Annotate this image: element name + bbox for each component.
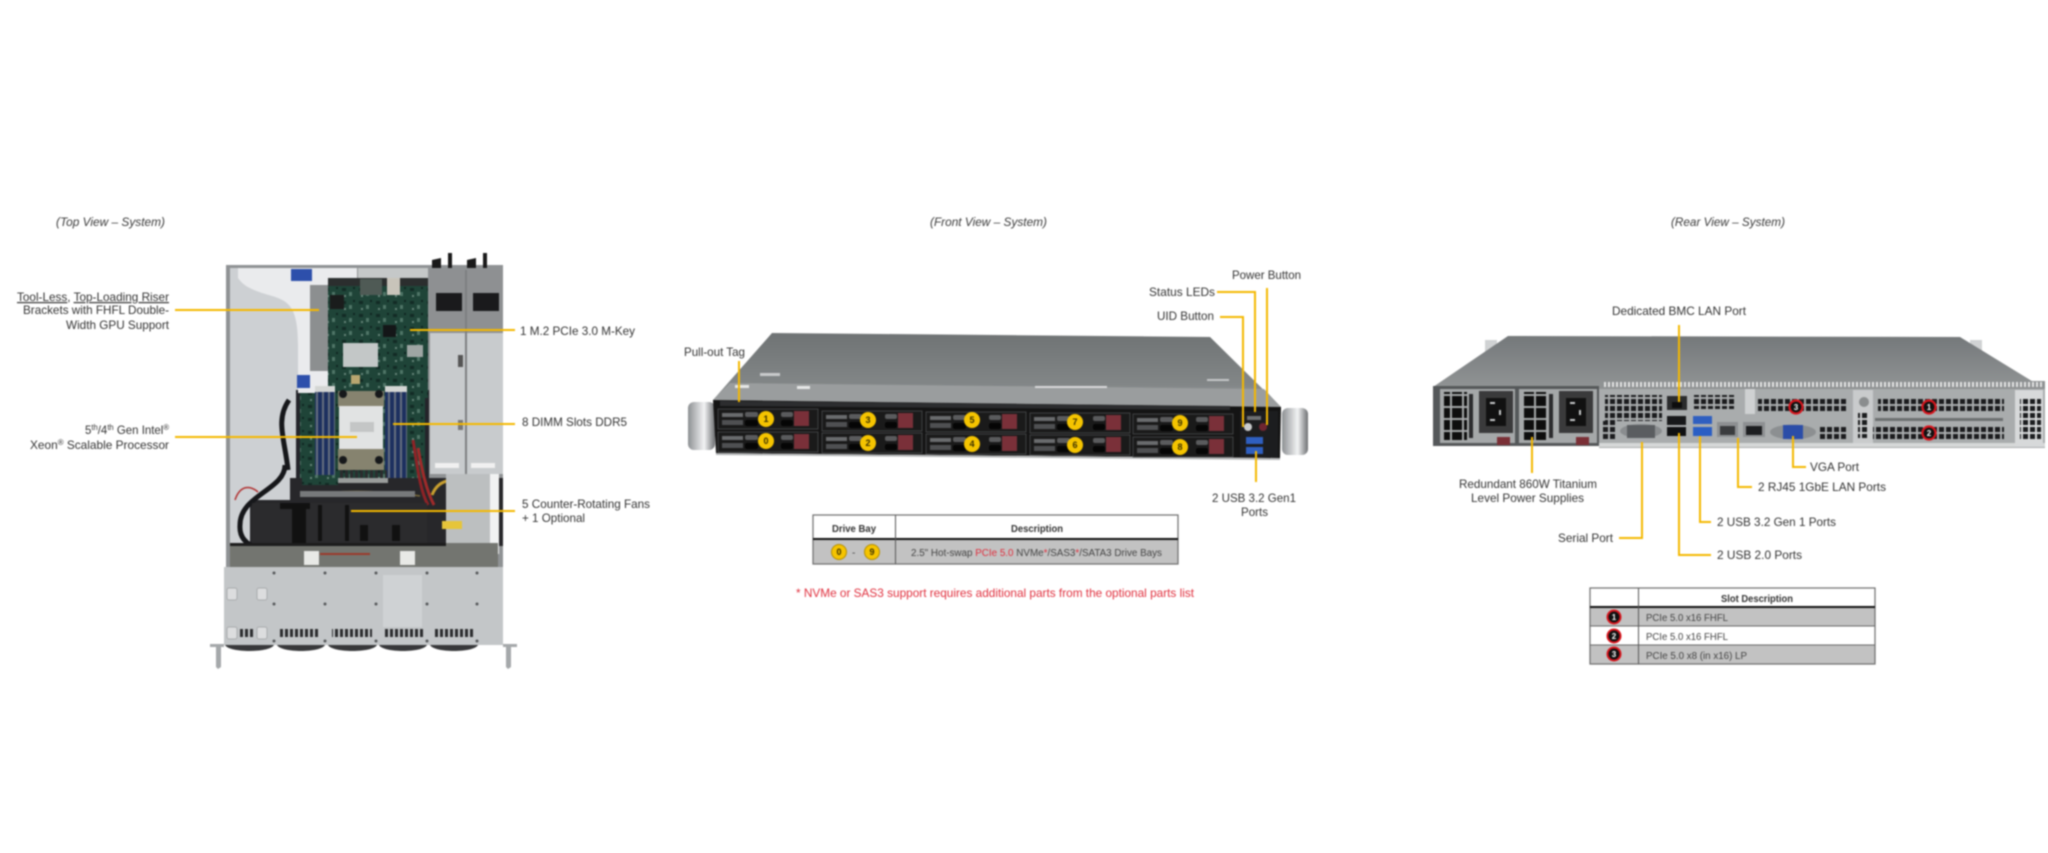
label: M.2: 1 M.2 PCIe 3.0 M-Key xyxy=(520,324,635,338)
CPU xyxy=(338,390,384,470)
label: fans: + 1 Optional xyxy=(522,511,585,525)
bay numbers: 7 xyxy=(1072,417,1078,427)
label: riser brackets: Width GPU Support xyxy=(66,318,170,332)
blue tags xyxy=(291,269,312,388)
label: serial port: Serial Port xyxy=(1558,531,1614,545)
leader: processor xyxy=(175,436,357,438)
leader: BMC LAN xyxy=(1678,325,1680,402)
title: rear view: (Rear View – System) xyxy=(1671,215,1785,229)
control panel xyxy=(1240,411,1278,457)
leader: RJ45 xyxy=(1738,438,1752,487)
table: slot description: PCIe 5.0 x16 FHFL xyxy=(1646,613,1728,624)
label: USB ports: Ports xyxy=(1241,505,1268,519)
badge: range end xyxy=(864,544,880,560)
bay numbers xyxy=(763,414,1183,452)
label: USB ports: 2 USB 3.2 Gen1 xyxy=(1212,491,1296,505)
bay numbers: 2 xyxy=(865,438,871,448)
slot badge numbers: 2 xyxy=(1927,429,1932,438)
VGA port xyxy=(1770,424,1816,440)
label: pull-out tag: Pull-out Tag xyxy=(684,345,745,359)
table badge numbers: 1 xyxy=(1612,613,1617,622)
label: power supplies xyxy=(1459,477,1597,505)
label: processor xyxy=(30,423,169,452)
bay numbers: 0 xyxy=(763,436,769,446)
table: drive bay: 9 xyxy=(869,547,875,557)
leader: VGA xyxy=(1793,436,1806,467)
slot bracket xyxy=(1745,389,2003,443)
wiring xyxy=(235,400,450,552)
fan bumps xyxy=(225,645,478,651)
label: riser brackets xyxy=(17,290,170,332)
title: top view: (Top View – System) xyxy=(56,215,165,229)
rear strip xyxy=(230,543,498,567)
RJ45 ports xyxy=(1717,422,1765,437)
DIMM slots xyxy=(315,386,407,478)
drive bays xyxy=(718,409,1233,457)
IO panel xyxy=(1599,381,2045,448)
label: BMC LAN: Dedicated BMC LAN Port xyxy=(1612,304,1747,318)
bay numbers: 6 xyxy=(1072,440,1078,450)
leader: UID button xyxy=(1220,317,1243,427)
label: processor: Xeon xyxy=(30,438,58,452)
label: VGA: VGA Port xyxy=(1810,460,1860,474)
slot badge numbers: 3 xyxy=(1794,403,1799,412)
slot badge numbers: 1 xyxy=(1927,403,1932,412)
table badge numbers: 3 xyxy=(1612,650,1617,659)
riser card xyxy=(310,285,328,371)
bay numbers: 5 xyxy=(969,415,975,425)
leader: USB xyxy=(1255,451,1257,482)
label: fans: 5 Counter-Rotating Fans xyxy=(522,497,650,511)
cable cover xyxy=(442,474,499,554)
label: processor: th xyxy=(91,423,98,432)
table: slot description: PCIe 5.0 x8 (in x16) LP xyxy=(1646,651,1747,662)
image: server rear view xyxy=(1433,336,2045,448)
bay numbers: 4 xyxy=(969,439,975,449)
bay numbers: 1 xyxy=(763,414,769,424)
label: DIMM: 8 DIMM Slots DDR5 xyxy=(522,415,627,429)
table: drive bay: 2.5" Hot-swap PCIe 5.0 NVMe*/SAS3*/SATA3 Drive Bays xyxy=(911,548,1162,559)
chipset heatsink xyxy=(343,343,378,367)
table: slot description xyxy=(1590,588,1875,664)
label: power supplies: Redundant 860W Titanium xyxy=(1459,477,1597,491)
title: front view: (Front View – System) xyxy=(930,215,1047,229)
label: processor: Scalable Processor xyxy=(64,438,169,452)
leader: USB 3.2 xyxy=(1700,436,1711,522)
riser bracket xyxy=(238,268,357,393)
dark bay behind fans and cover xyxy=(290,478,503,546)
right end xyxy=(2015,390,2043,447)
label: status LEDs: Status LEDs xyxy=(1149,285,1215,299)
slot badges xyxy=(1790,400,1936,440)
bay numbers: 9 xyxy=(1177,418,1183,428)
table: drive bay: Drive Bay xyxy=(832,524,876,535)
leader: serial port xyxy=(1619,442,1642,538)
leader: M.2 xyxy=(410,329,515,331)
label: processor: ® xyxy=(163,423,169,432)
badge: range start xyxy=(832,544,846,560)
label: USB 3.2: 2 USB 3.2 Gen 1 Ports xyxy=(1717,515,1836,529)
bay numbers: 8 xyxy=(1177,442,1183,452)
bay numbers: 3 xyxy=(865,415,871,425)
label: UID button: UID Button xyxy=(1157,309,1214,323)
table badge numbers: 2 xyxy=(1612,632,1617,641)
vent holes xyxy=(1603,395,2004,441)
label: processor: ® xyxy=(58,438,64,447)
panel: rear view xyxy=(1433,215,2045,664)
table: drive bay: 0 xyxy=(836,547,842,557)
mounting ears xyxy=(210,644,517,669)
label: riser brackets: Tool-Less, Top-Loading Riser xyxy=(17,290,169,304)
leader: riser xyxy=(175,309,319,311)
label: USB ports xyxy=(1212,491,1296,519)
table badge numbers xyxy=(1612,613,1617,659)
gray bar above fans xyxy=(300,491,415,497)
table: drive bay: - xyxy=(852,548,855,559)
label: processor: Gen Intel xyxy=(114,423,163,437)
label: power button: Power Button xyxy=(1232,268,1301,282)
leader: DIMM xyxy=(393,423,515,425)
table: drive bay xyxy=(813,515,1178,564)
bay number badges xyxy=(758,411,1188,455)
table: slot description: PCIe 5.0 x16 FHFL xyxy=(1646,632,1728,643)
label: processor: 5 xyxy=(85,423,92,437)
label: processor: th xyxy=(107,423,114,432)
image: server top view xyxy=(210,253,517,669)
leader: pull-out tag xyxy=(738,361,740,402)
leader: power button xyxy=(1266,288,1268,425)
leader: status LEDs xyxy=(1217,292,1255,412)
leader: power supplies xyxy=(1531,437,1533,473)
ears xyxy=(688,402,1308,455)
table: drive bay: Description xyxy=(1011,524,1063,535)
label: RJ45: 2 RJ45 1GbE LAN Ports xyxy=(1758,480,1886,494)
image: server front view xyxy=(688,333,1308,460)
slot badge numbers xyxy=(1794,403,1932,438)
label: riser brackets: Brackets with FHFL Double- xyxy=(23,303,169,317)
front plate xyxy=(224,567,503,645)
label: processor: /4 xyxy=(98,423,108,437)
label: fans xyxy=(522,497,650,525)
footnote: * NVMe or SAS3 support requires additional parts from the optional parts list xyxy=(796,586,1195,600)
fans xyxy=(252,503,427,543)
table badges xyxy=(1608,610,1620,660)
leader: USB 2.0 xyxy=(1679,433,1711,555)
PSU bay xyxy=(1433,386,1599,446)
leader: fans xyxy=(351,510,515,512)
face xyxy=(713,400,1281,458)
table: slot description: Slot Description xyxy=(1721,594,1793,605)
panel: top view xyxy=(17,215,650,669)
PSU xyxy=(430,253,503,474)
serial port xyxy=(1620,424,1662,438)
label: power supplies: Level Power Supplies xyxy=(1471,491,1584,505)
panel: front view xyxy=(684,215,1308,600)
ports xyxy=(1667,396,1712,436)
label: USB 2.0: 2 USB 2.0 Ports xyxy=(1717,548,1802,562)
